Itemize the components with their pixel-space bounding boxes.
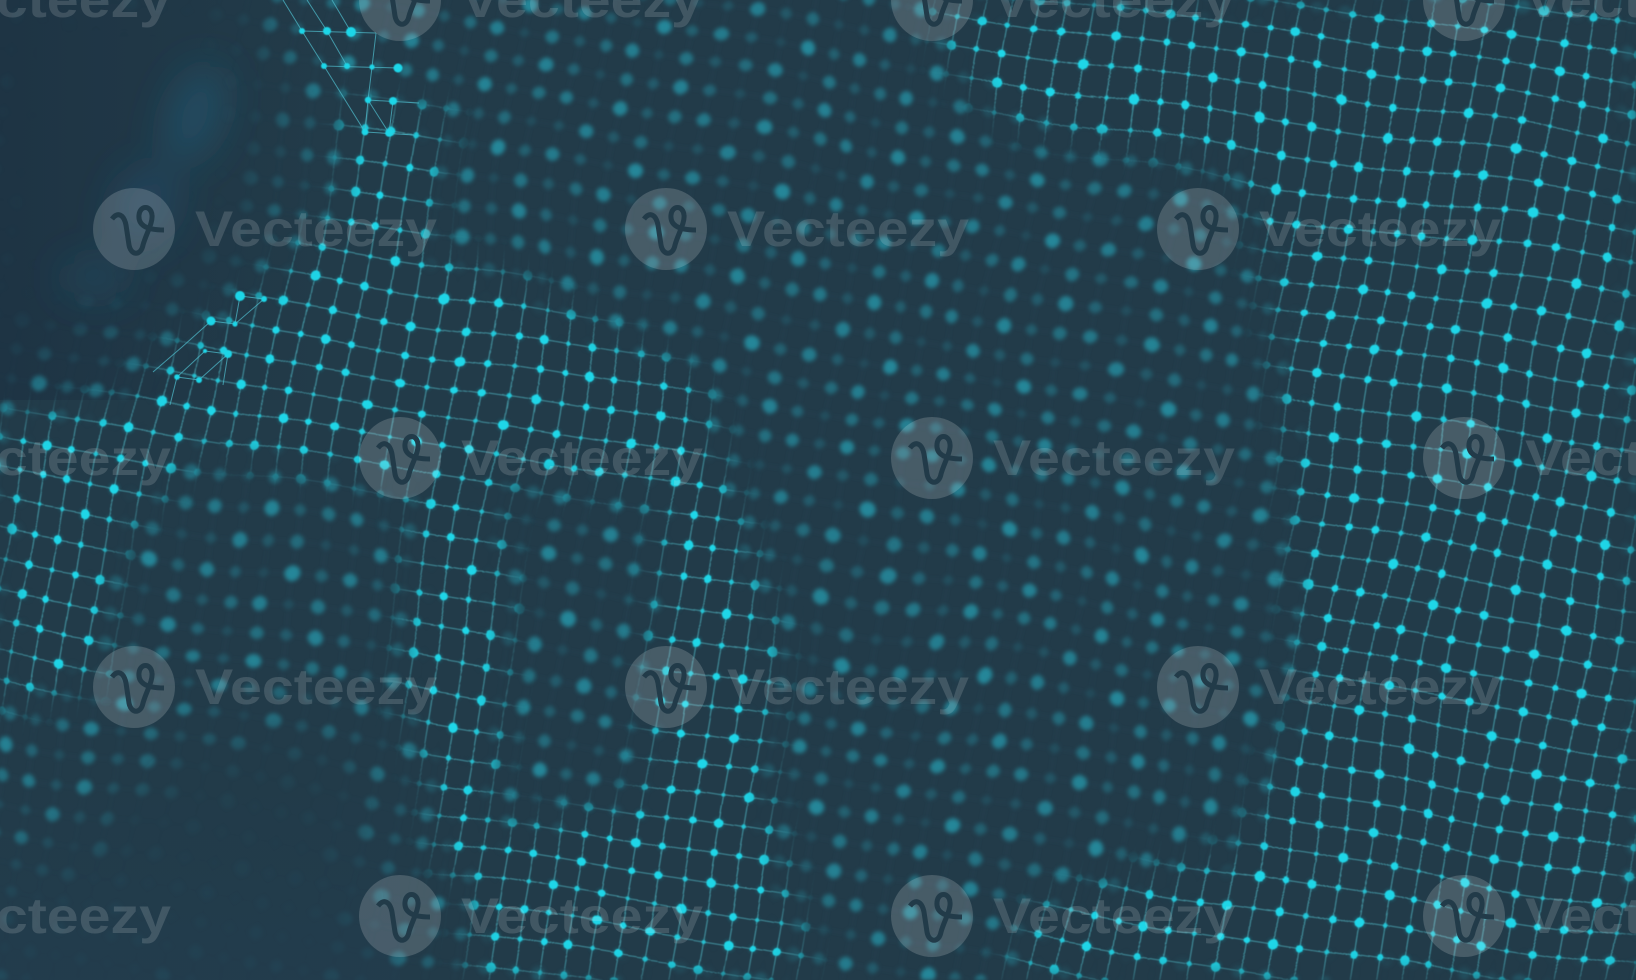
watermark: Vecteezy bbox=[1259, 659, 1501, 715]
loose mesh fragment at top bbox=[283, 0, 419, 137]
watermark bbox=[359, 0, 703, 41]
watermark: Vecteezy bbox=[1259, 201, 1501, 257]
watermark row 3 bbox=[93, 646, 1501, 728]
watermark: Vecteezy bbox=[993, 888, 1235, 944]
dark blue lower-left wash bbox=[0, 780, 400, 980]
watermark: Vecteezy bbox=[993, 430, 1235, 486]
dark left edge bbox=[0, 0, 320, 400]
watermark: Vecteezy bbox=[195, 659, 437, 715]
watermark bbox=[891, 417, 1235, 499]
watermark bbox=[1423, 417, 1636, 499]
watermark bbox=[1423, 0, 1636, 41]
watermark bbox=[359, 417, 703, 499]
watermark bbox=[625, 646, 969, 728]
watermark row 2 bbox=[0, 417, 1636, 499]
watermark: Vecteezy bbox=[195, 201, 437, 257]
watermark: Vecteezy bbox=[727, 201, 969, 257]
loose mesh fragment at left bbox=[153, 291, 267, 405]
watermark bbox=[891, 0, 1235, 41]
watermark row 0 bbox=[0, 0, 1636, 41]
watermark: Vecteezy bbox=[461, 888, 703, 944]
watermark row 4 bbox=[0, 875, 1636, 957]
blue haze in upper left bbox=[61, 57, 237, 296]
watermark: Vecteezy bbox=[727, 659, 969, 715]
watermark bbox=[891, 875, 1235, 957]
watermark bbox=[93, 646, 437, 728]
watermark bbox=[1157, 646, 1501, 728]
watermark bbox=[1157, 188, 1501, 270]
watermark bbox=[625, 188, 969, 270]
watermark bbox=[359, 875, 703, 957]
watermark row 1 bbox=[93, 188, 1501, 270]
watermark bbox=[93, 188, 437, 270]
watermark bbox=[1423, 875, 1636, 957]
watermark: Vecteezy bbox=[461, 430, 703, 486]
